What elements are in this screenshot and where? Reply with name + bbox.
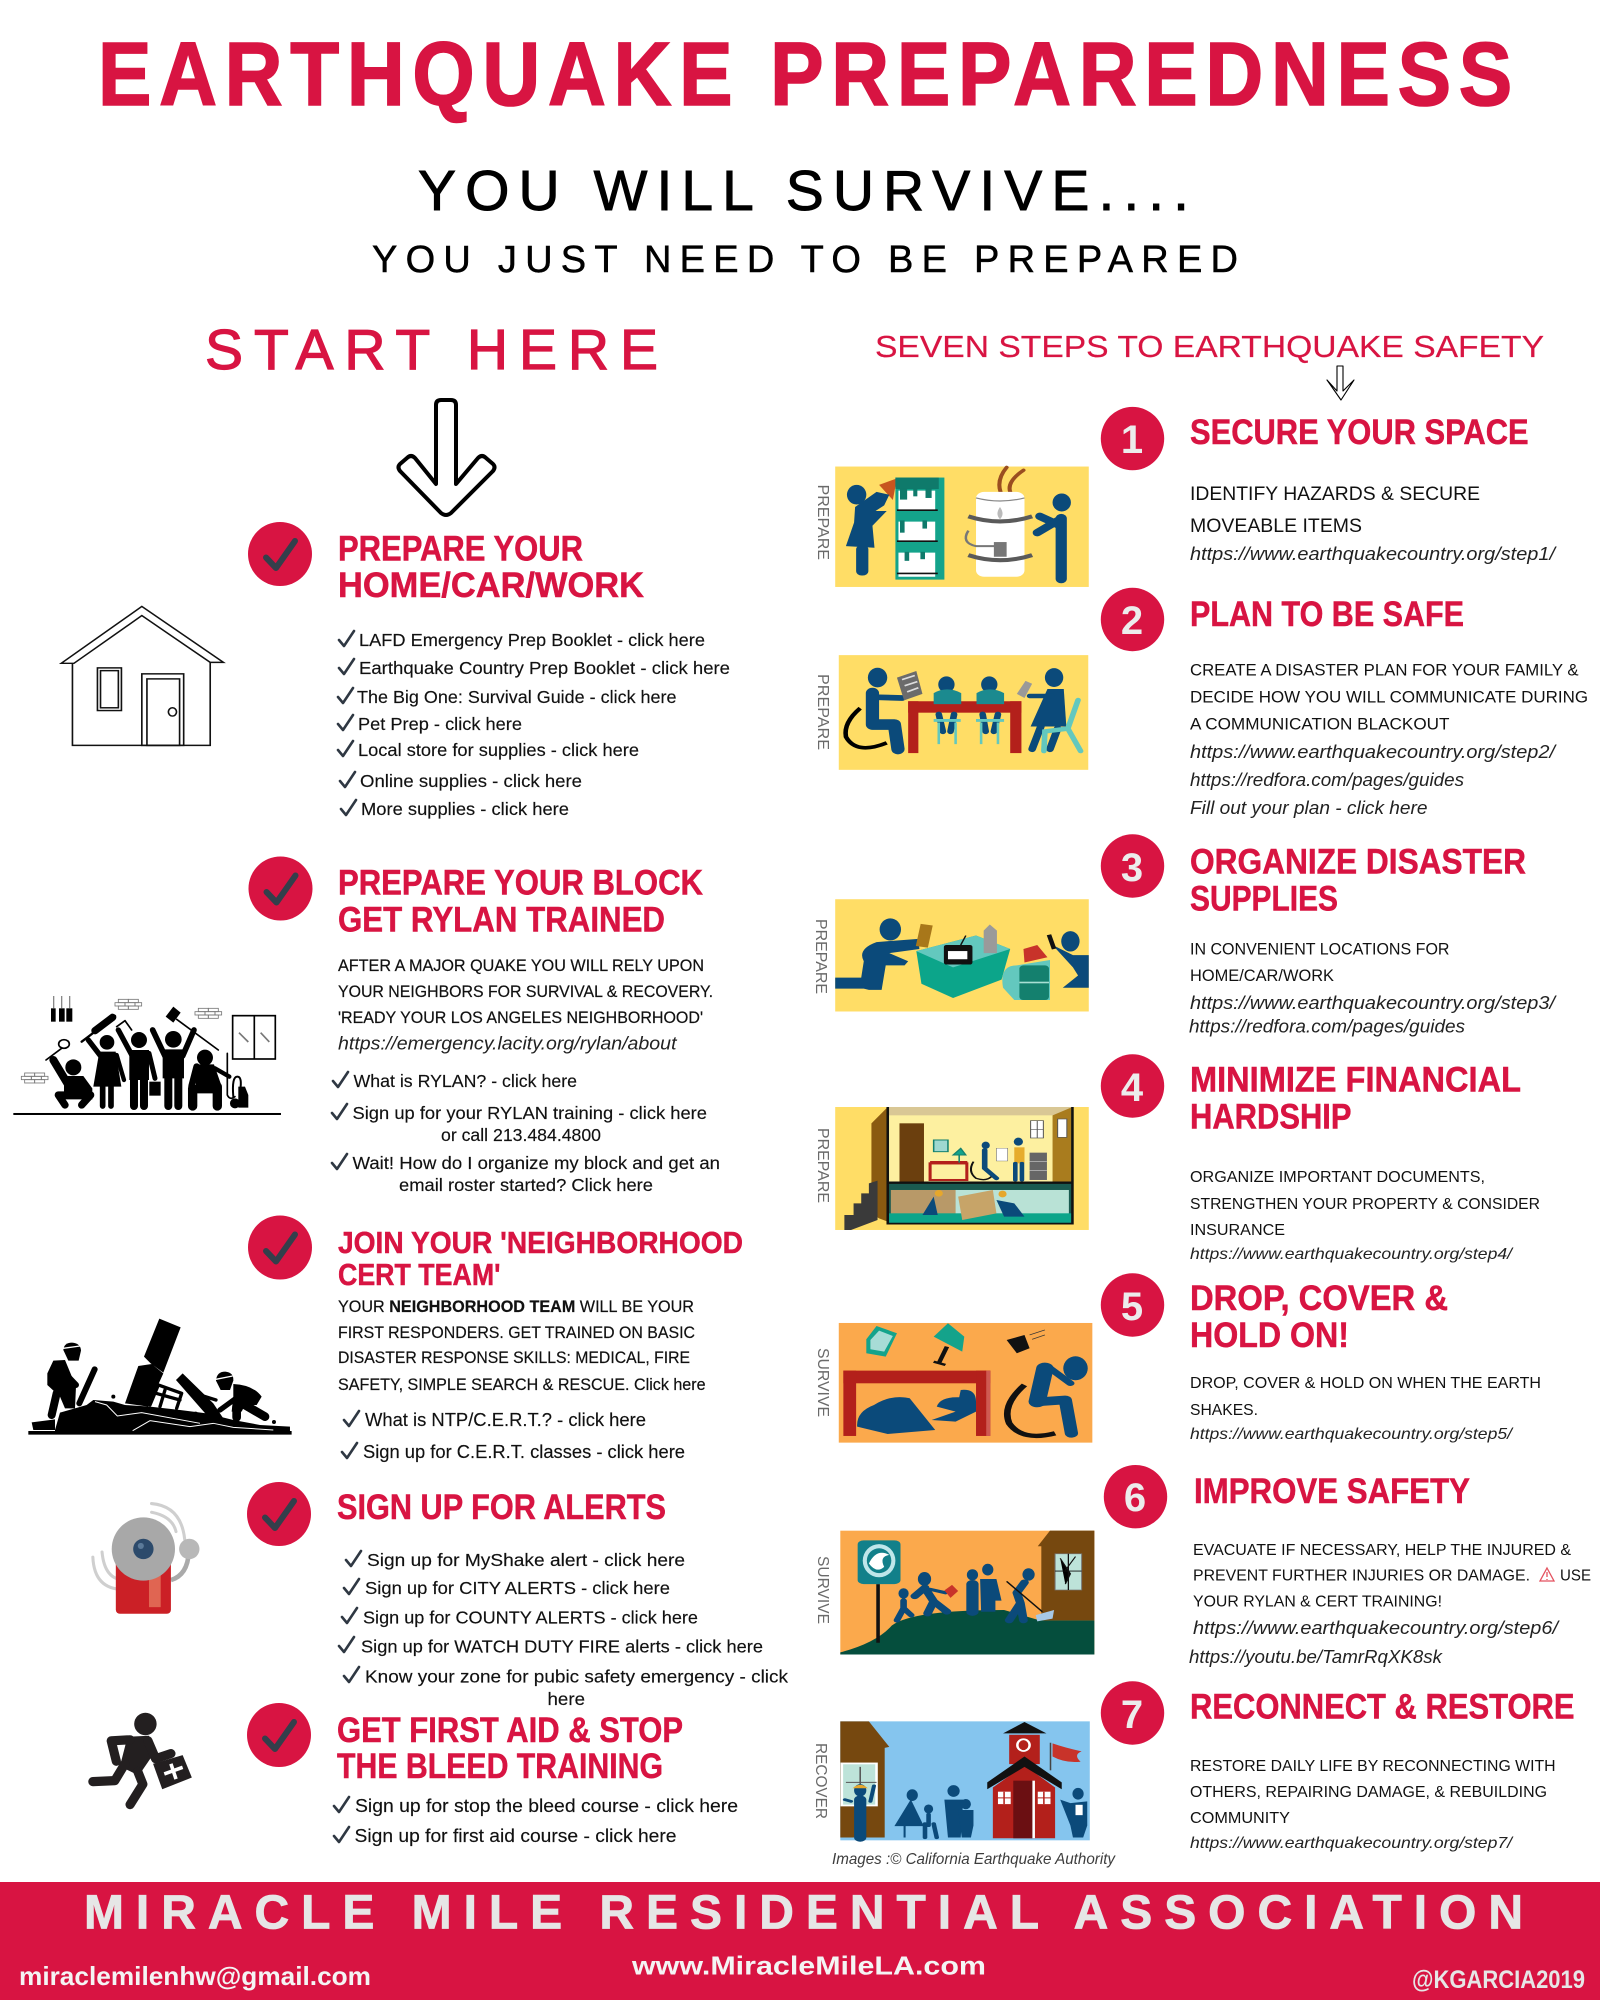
checklist: cert: What is NTP/C.E.R.T.? - click here bbox=[365, 1410, 646, 1430]
image: reconnect bbox=[840, 1721, 1090, 1840]
text: step 6 bbox=[1189, 1542, 1591, 1667]
text: neighbors bbox=[338, 957, 713, 1054]
checklist: rylan bbox=[332, 1071, 720, 1195]
side label: prepare: PREPARE bbox=[814, 1128, 831, 1203]
heading: seven steps: SEVEN STEPS TO EARTHQUAKE SAFETY bbox=[875, 329, 1544, 364]
panel: sign up for alerts bbox=[93, 1482, 788, 1709]
vacuum bbox=[227, 1053, 235, 1098]
icon: number 7 bbox=[1101, 1681, 1164, 1745]
text: step 3 bbox=[1189, 940, 1557, 1037]
panel: step 7 bbox=[812, 1681, 1574, 1868]
text: step 3: IN CONVENIENT LOCATIONS FOR bbox=[1190, 940, 1450, 959]
icon: number 3 bbox=[1101, 834, 1164, 898]
icon: number 6: 6 bbox=[1124, 1476, 1146, 1520]
image: supplies bbox=[835, 899, 1089, 1011]
text: team: FIRST RESPONDERS. GET TRAINED ON BASIC bbox=[338, 1324, 695, 1342]
heading: cert team: CERT TEAM' bbox=[338, 1257, 500, 1292]
heading: first aid: GET FIRST AID & STOP bbox=[337, 1711, 683, 1750]
text: step 6: https://youtu.be/TamrRqXK8sk bbox=[1189, 1647, 1443, 1667]
side label: survive: SURVIVE bbox=[814, 1556, 831, 1624]
icon: neighbors with tools bbox=[13, 996, 281, 1115]
image: secure space bbox=[835, 467, 1089, 587]
text: step 6: PREVENT FURTHER INJURIES OR DAMAGE. bbox=[1193, 1568, 1530, 1585]
text: step 4: STRENGTHEN YOUR PROPERTY & CONSIDER bbox=[1190, 1196, 1540, 1213]
icon: runner with first aid kit bbox=[93, 1713, 192, 1805]
heading: step 5: DROP, COVER & bbox=[1190, 1279, 1448, 1318]
heading: step 4: MINIMIZE FINANCIAL bbox=[1190, 1061, 1521, 1100]
heading: first aid bbox=[337, 1711, 683, 1786]
image: plan bbox=[839, 655, 1088, 770]
checklist: rylan: What is RYLAN? - click here bbox=[354, 1071, 577, 1091]
text: step 1: MOVEABLE ITEMS bbox=[1190, 516, 1362, 537]
panel: prepare your home bbox=[61, 522, 730, 819]
arrow: seven steps bbox=[1327, 366, 1354, 400]
icon: check badge bbox=[247, 1703, 311, 1767]
icon: number 1: 1 bbox=[1121, 418, 1143, 462]
checklist: home: Online supplies - click here bbox=[360, 771, 582, 791]
heading: first aid: THE BLEED TRAINING bbox=[337, 1747, 663, 1786]
checklist: home: LAFD Emergency Prep Booklet - click here bbox=[359, 630, 705, 650]
kneeling man bbox=[65, 1059, 81, 1075]
checklist: first aid bbox=[334, 1796, 738, 1846]
checklist: alerts: Sign up for COUNTY ALERTS - click here bbox=[363, 1608, 698, 1628]
checklist: first aid: Sign up for stop the bleed course - click here bbox=[355, 1796, 738, 1816]
text: step 2: https://redfora.com/pages/guides bbox=[1190, 770, 1464, 790]
icon: number 4: 4 bbox=[1121, 1066, 1144, 1110]
panel: step 6 bbox=[814, 1465, 1591, 1667]
heading: step 3: ORGANIZE DISASTER bbox=[1190, 842, 1526, 882]
heading: prepare your block: PREPARE YOUR BLOCK bbox=[338, 864, 703, 902]
checklist: first aid: Sign up for first aid course - click here bbox=[354, 1826, 676, 1846]
subtitle: you just need to be prepared: YOU JUST NEED TO BE PREPARED bbox=[372, 239, 1238, 281]
icon: house bbox=[61, 606, 223, 745]
text: step 4: INSURANCE bbox=[1190, 1222, 1285, 1239]
panel: step 1 bbox=[814, 407, 1557, 587]
text: step 6: USE bbox=[1560, 1568, 1591, 1585]
text: step 5 bbox=[1190, 1375, 1541, 1443]
checklist: rylan: email roster started? Click here bbox=[399, 1175, 653, 1195]
heading: prepare your block bbox=[338, 864, 703, 940]
icon: number 2: 2 bbox=[1121, 599, 1143, 643]
image: drop cover hold bbox=[839, 1323, 1092, 1443]
heading: step 1: SECURE YOUR SPACE bbox=[1190, 413, 1529, 452]
checklist: home: Earthquake Country Prep Booklet - click here bbox=[359, 658, 730, 678]
text: step 2: https://www.earthquakecountry.org/step2/ bbox=[1190, 742, 1557, 762]
text: step 4 bbox=[1190, 1169, 1540, 1263]
arrow: start here bbox=[398, 400, 494, 515]
text: step 5: https://www.earthquakecountry.org/step5/ bbox=[1190, 1426, 1514, 1443]
panel: prepare your block bbox=[13, 856, 720, 1195]
text: step 2: Fill out your plan - click here bbox=[1190, 798, 1428, 818]
text: step 2 bbox=[1190, 660, 1588, 818]
heading: step 5: HOLD ON! bbox=[1190, 1316, 1349, 1355]
checklist: alerts: Sign up for WATCH DUTY FIRE alerts - click here bbox=[361, 1636, 763, 1656]
side label: prepare: PREPARE bbox=[812, 919, 829, 994]
heading: step 2: PLAN TO BE SAFE bbox=[1190, 595, 1464, 634]
icon: number 5 bbox=[1101, 1273, 1164, 1337]
icon: number 4 bbox=[1101, 1054, 1164, 1118]
text: step 1 bbox=[1190, 484, 1557, 564]
heading: prepare your home bbox=[338, 530, 644, 605]
heading: step 4: HARDSHIP bbox=[1190, 1098, 1352, 1137]
text: step 1: https://www.earthquakecountry.org/step1/ bbox=[1190, 544, 1557, 564]
right worker bbox=[216, 1372, 233, 1390]
checklist: home: Pet Prep - click here bbox=[358, 714, 522, 734]
text: step 1: IDENTIFY HAZARDS & SECURE bbox=[1190, 484, 1480, 505]
text: step 4: https://www.earthquakecountry.org/step4/ bbox=[1190, 1246, 1514, 1263]
heading: step 3 bbox=[1190, 842, 1526, 919]
checklist: home bbox=[338, 630, 730, 819]
text: team: YOUR NEIGHBORHOOD TEAM WILL BE YOUR bbox=[338, 1298, 694, 1316]
text: neighbors: YOUR NEIGHBORS FOR SURVIVAL & RECOVERY. bbox=[338, 983, 713, 1001]
checklist: rylan: Sign up for your RYLAN training - click here bbox=[352, 1103, 707, 1123]
side label: survive: SURVIVE bbox=[814, 1348, 831, 1417]
text: step 7 bbox=[1190, 1758, 1556, 1852]
side label: prepare: PREPARE bbox=[814, 484, 831, 560]
left worker bbox=[63, 1343, 81, 1361]
panel: step 5 bbox=[814, 1273, 1541, 1443]
text: step 7: COMMUNITY bbox=[1190, 1810, 1290, 1827]
checklist: home: Local store for supplies - click here bbox=[358, 740, 639, 760]
text: step 6: YOUR RYLAN & CERT TRAINING! bbox=[1193, 1594, 1442, 1610]
heading: step 4 bbox=[1190, 1061, 1521, 1137]
text: step 3: https://www.earthquakecountry.org/step3/ bbox=[1190, 993, 1557, 1013]
footer email: miraclemilenhw@gmail.com bbox=[19, 1961, 371, 1991]
heading: cert team bbox=[338, 1225, 743, 1292]
icon: number 7: 7 bbox=[1121, 1693, 1143, 1737]
checklist: cert bbox=[342, 1410, 685, 1462]
footer title: MIRACLE MILE RESIDENTIAL ASSOCIATION bbox=[84, 1887, 1523, 1940]
checklist: alerts: here bbox=[548, 1689, 585, 1709]
footer band bbox=[0, 1882, 1600, 2000]
heading: step 3: SUPPLIES bbox=[1190, 880, 1338, 919]
icon: number 5: 5 bbox=[1121, 1285, 1143, 1329]
text: step 6: https://www.earthquakecountry.org/step6/ bbox=[1193, 1618, 1560, 1638]
checklist: home: The Big One: Survival Guide - click here bbox=[357, 687, 676, 707]
checklist: rylan: Wait! How do I organize my block and get an bbox=[352, 1153, 720, 1173]
text: step 7: https://www.earthquakecountry.org/step7/ bbox=[1190, 1835, 1514, 1852]
icon: number 3: 3 bbox=[1121, 846, 1143, 890]
heading: prepare your home: HOME/CAR/WORK bbox=[338, 566, 644, 605]
text: step 5: SHAKES. bbox=[1190, 1402, 1258, 1419]
seated man bbox=[197, 1050, 213, 1066]
text: team: SAFETY, SIMPLE SEARCH & RESCUE. Click here bbox=[338, 1376, 706, 1394]
icon: check badge bbox=[248, 856, 312, 920]
image credit: Images :© California Earthquake Authority bbox=[832, 1851, 1116, 1868]
checklist: home: More supplies - click here bbox=[361, 799, 569, 819]
text: step 5: DROP, COVER & HOLD ON WHEN THE EARTH bbox=[1190, 1375, 1541, 1392]
checklist: alerts: Know your zone for pubic safety emergency - click bbox=[365, 1667, 788, 1687]
side label: recover: RECOVER bbox=[812, 1743, 829, 1819]
text: step 3: https://redfora.com/pages/guides bbox=[1189, 1017, 1465, 1037]
heading: start here: START HERE bbox=[205, 318, 658, 382]
text: step 4: ORGANIZE IMPORTANT DOCUMENTS, bbox=[1190, 1169, 1485, 1186]
text: step 2: CREATE A DISASTER PLAN FOR YOUR FAMILY & bbox=[1190, 660, 1579, 680]
heading: prepare your block: GET RYLAN TRAINED bbox=[338, 901, 665, 940]
text: step 6: EVACUATE IF NECESSARY, HELP THE INJURED & bbox=[1193, 1542, 1571, 1559]
panel: step 2 bbox=[814, 588, 1588, 818]
panel: step 4 bbox=[814, 1054, 1540, 1263]
checklist: alerts: Sign up for MyShake alert - click here bbox=[367, 1550, 685, 1570]
text: step 7: RESTORE DAILY LIFE BY RECONNECTING WITH bbox=[1190, 1758, 1556, 1775]
woman bbox=[100, 1035, 114, 1050]
icon: check badge bbox=[247, 1482, 311, 1546]
heading: prepare your home: PREPARE YOUR bbox=[338, 530, 583, 568]
icon: warning bbox=[1540, 1568, 1554, 1581]
heading: alerts: SIGN UP FOR ALERTS bbox=[337, 1488, 666, 1527]
text: step 3: HOME/CAR/WORK bbox=[1190, 966, 1335, 985]
text: neighbors: https://emergency.lacity.org/rylan/about bbox=[338, 1034, 678, 1054]
icon: number 6 bbox=[1104, 1465, 1167, 1528]
checklist: alerts: Sign up for CITY ALERTS - click here bbox=[365, 1578, 670, 1598]
text: step 2: DECIDE HOW YOU WILL COMMUNICATE DURING bbox=[1190, 688, 1588, 706]
title: EARTHQUAKE PREPAREDNESS bbox=[98, 25, 1512, 125]
icon: number 1 bbox=[1101, 407, 1164, 470]
panel: step 3 bbox=[812, 834, 1557, 1037]
heading: cert team: JOIN YOUR 'NEIGHBORHOOD bbox=[338, 1225, 743, 1260]
text: step 2: A COMMUNICATION BLACKOUT bbox=[1190, 714, 1450, 733]
heading: step 6: IMPROVE SAFETY bbox=[1194, 1472, 1470, 1511]
text: neighbors: 'READY YOUR LOS ANGELES NEIGHBORHOOD' bbox=[338, 1009, 703, 1027]
checklist: rylan: or call 213.484.4800 bbox=[441, 1125, 601, 1145]
image: financial bbox=[835, 1107, 1089, 1230]
footer website: www.MiracleMileLA.com bbox=[631, 1950, 986, 1980]
icon: check badge bbox=[248, 522, 312, 586]
icon: rescue workers on rubble bbox=[28, 1319, 292, 1435]
text: neighbors: AFTER A MAJOR QUAKE YOU WILL RELY UPON bbox=[338, 957, 704, 975]
checklist: cert: Sign up for C.E.R.T. classes - click here bbox=[363, 1442, 685, 1462]
text: team: DISASTER RESPONSE SKILLS: MEDICAL, FIRE bbox=[338, 1349, 690, 1367]
icon: number 2 bbox=[1101, 588, 1164, 651]
panel: neighborhood cert team bbox=[28, 1216, 743, 1462]
icon: check badge bbox=[248, 1216, 312, 1280]
icon: alarm bell bbox=[93, 1504, 199, 1614]
image: improve safety bbox=[840, 1531, 1094, 1654]
subtitle: you will survive: YOU WILL SURVIVE.... bbox=[418, 159, 1189, 223]
panel: first aid bbox=[93, 1703, 738, 1846]
text: step 7: OTHERS, REPAIRING DAMAGE, & REBUILDING bbox=[1190, 1784, 1547, 1801]
man raising broom bbox=[165, 1031, 182, 1048]
text: team bbox=[338, 1298, 706, 1394]
heading: step 5 bbox=[1190, 1279, 1448, 1355]
checklist: alerts bbox=[339, 1550, 788, 1709]
man with bucket bbox=[131, 1032, 147, 1048]
side label: prepare: PREPARE bbox=[814, 674, 831, 750]
